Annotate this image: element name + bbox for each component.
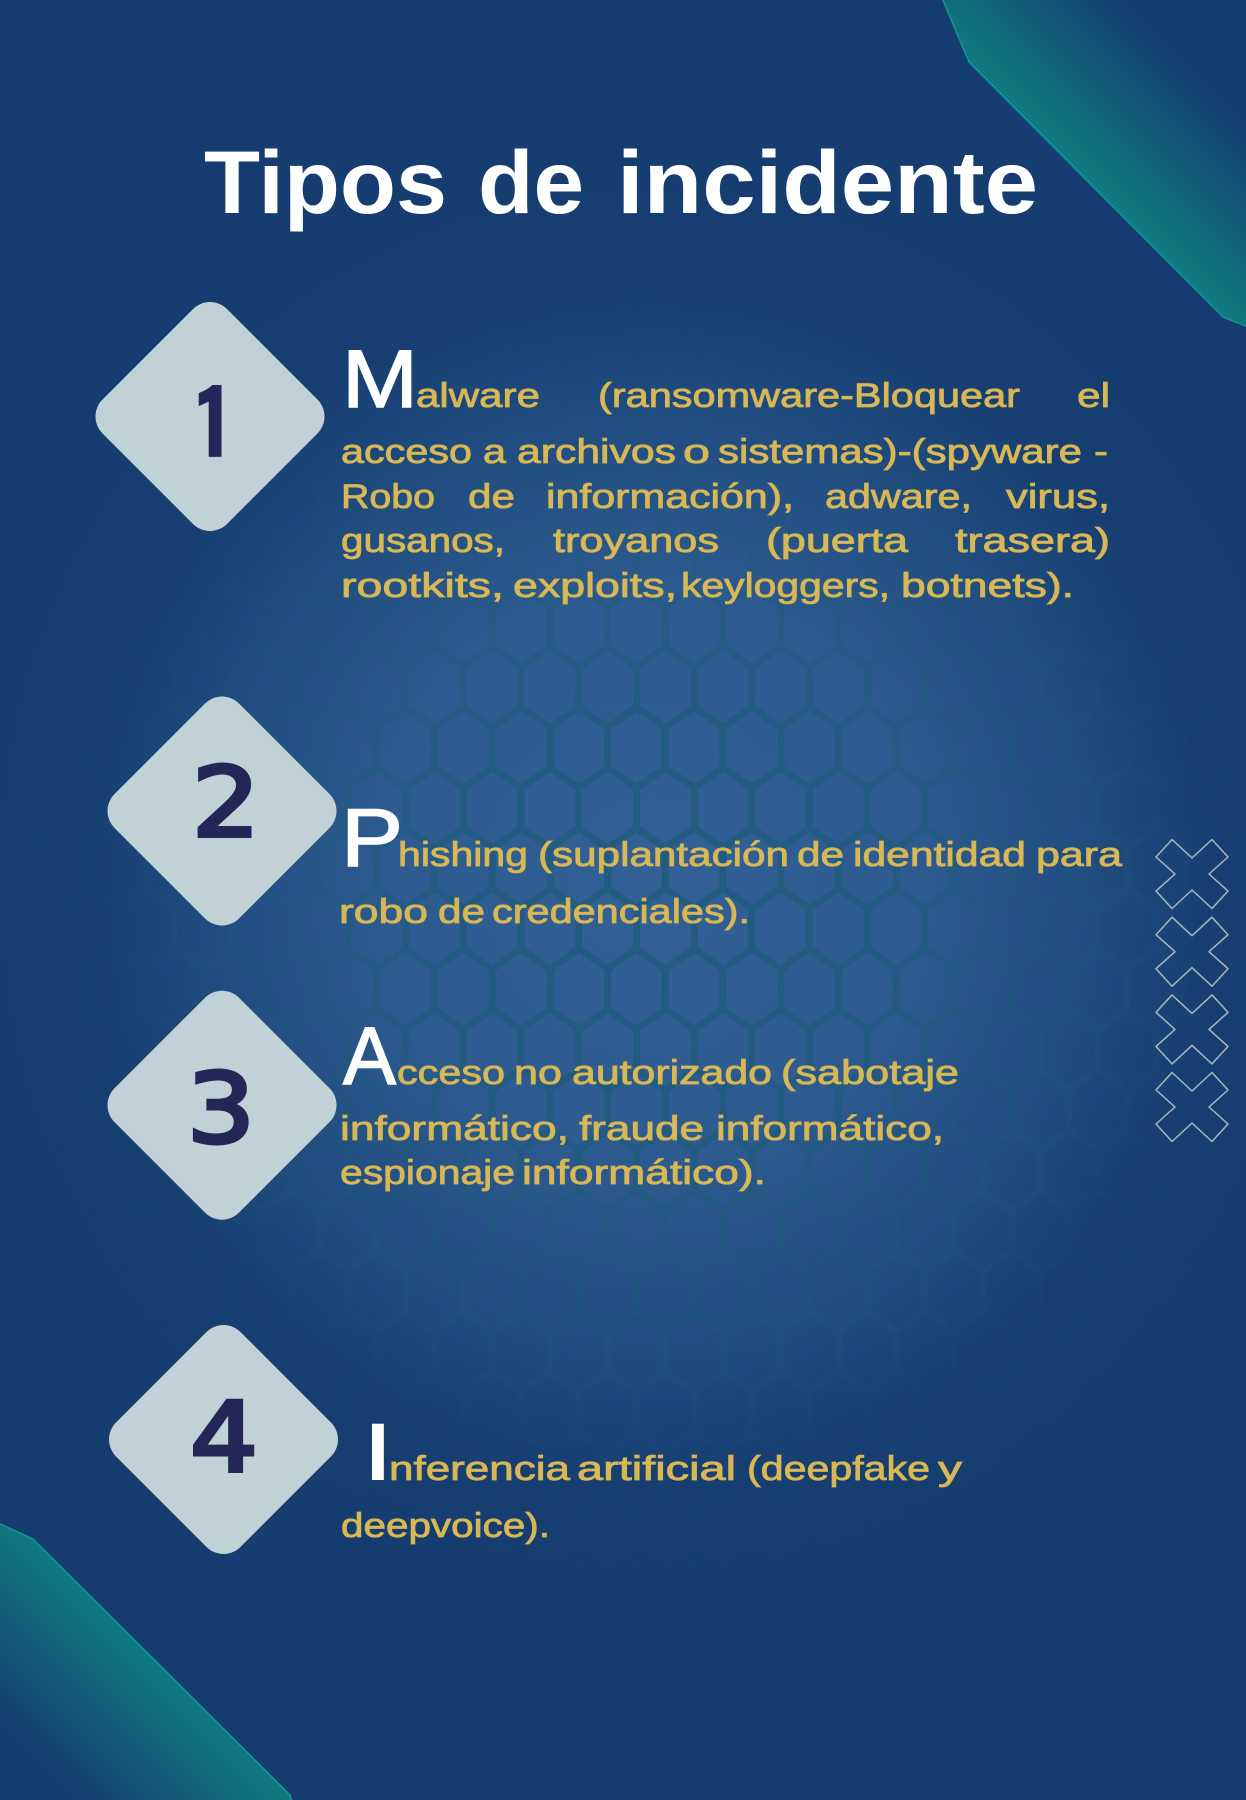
item 1: Malware text: a xyxy=(483,433,506,471)
item 1: Malware text: Robo xyxy=(341,478,435,516)
item 4: Inferencia text: (deepfake xyxy=(747,1450,930,1488)
item 4: Inferencia text: artificial xyxy=(577,1450,736,1488)
item 1: Malware text: exploits, xyxy=(513,567,677,605)
icon: X 2 xyxy=(1156,917,1228,986)
item 1: Malware text: - xyxy=(1094,433,1108,471)
item 1: Malware text: (ransomware-Bloquear xyxy=(598,377,1020,415)
item 1: Malware text: alware xyxy=(416,377,540,415)
item 2: Phishing text xyxy=(339,793,1122,931)
item 3: number diamond xyxy=(98,981,346,1230)
item 1: Malware text: sistemas)-(spyware xyxy=(718,433,1082,471)
item 3: Acceso text: espionaje xyxy=(340,1154,515,1192)
item 1: Malware text xyxy=(341,334,1110,605)
initial M: M xyxy=(342,334,418,425)
title: de xyxy=(478,132,584,232)
item 3: Acceso text: cceso xyxy=(397,1054,505,1092)
item 1: Malware text: troyanos xyxy=(553,522,719,560)
hexagon pattern xyxy=(341,578,968,1230)
corner shape: top right xyxy=(942,0,1246,327)
item 3: Acceso text: informático). xyxy=(522,1154,766,1192)
item 3: Acceso text: informático, xyxy=(340,1110,569,1148)
item 3: Acceso text: fraude xyxy=(579,1110,704,1148)
item 4: Inferencia text: y xyxy=(938,1450,962,1488)
icon: X 1 xyxy=(1156,840,1228,908)
item 2: Phishing text: de xyxy=(797,836,844,874)
item 2: Phishing text: robo xyxy=(339,893,428,931)
item 2: Phishing text: para xyxy=(1036,836,1122,874)
item 2: Phishing text: hishing xyxy=(398,836,528,874)
item 1: Malware text: información), xyxy=(546,478,794,516)
corner shape: bottom left xyxy=(0,1523,292,1800)
item 1: Malware text: archivos xyxy=(517,433,676,471)
item 1: Malware text: o xyxy=(683,433,710,471)
item 3: Acceso text: autorizado xyxy=(572,1054,772,1092)
item 1: Malware text: botnets). xyxy=(901,567,1074,605)
decorative X icons column xyxy=(1156,840,1228,1142)
item 2: number diamond xyxy=(98,687,346,935)
item 3: Acceso text xyxy=(340,1011,959,1192)
item 4: Inferencia text: nferencia xyxy=(389,1450,570,1488)
item 1: Malware text: (puerta xyxy=(766,522,908,560)
initial P: P xyxy=(341,793,403,884)
item 1: Malware text: trasera) xyxy=(955,522,1110,560)
item 2: Phishing text: (suplantación xyxy=(538,836,789,874)
item 1: Malware text: rootkits, xyxy=(341,567,504,605)
initial A: A xyxy=(343,1011,396,1102)
initial I: I xyxy=(366,1407,389,1498)
number 4: 4 xyxy=(190,1382,258,1494)
item 1: Malware text: adware, xyxy=(825,478,972,516)
number 3: 3 xyxy=(187,1053,255,1165)
item 1: Malware text: de xyxy=(468,478,515,516)
item 1: Malware text: acceso xyxy=(341,433,472,471)
item 3: Acceso text: informático, xyxy=(716,1110,944,1148)
item 2: Phishing text: credenciales). xyxy=(492,893,750,931)
item 3: Acceso text: (sabotaje xyxy=(781,1054,959,1092)
item 4: Inferencia text xyxy=(341,1407,962,1545)
item 1: Malware text: virus, xyxy=(1006,478,1110,516)
item 4: number diamond xyxy=(99,1315,348,1564)
item 2: Phishing text: de xyxy=(438,893,485,931)
icon: X 3 xyxy=(1156,995,1228,1064)
title: Tipos xyxy=(204,132,447,232)
item 1: Malware text: el xyxy=(1077,377,1110,415)
item 2: Phishing text: identidad xyxy=(853,836,1026,874)
item 1: Malware text: gusanos, xyxy=(341,522,505,560)
item 1: Malware text: keyloggers, xyxy=(681,567,890,605)
item 1: number diamond xyxy=(86,292,334,541)
number 1: 1 xyxy=(190,376,238,471)
item 4: Inferencia text: deepvoice). xyxy=(341,1507,550,1545)
item 3: Acceso text: no xyxy=(514,1054,562,1092)
icon: X 4 xyxy=(1156,1072,1228,1142)
title: incidente xyxy=(617,132,1038,232)
number 2: 2 xyxy=(192,747,260,859)
